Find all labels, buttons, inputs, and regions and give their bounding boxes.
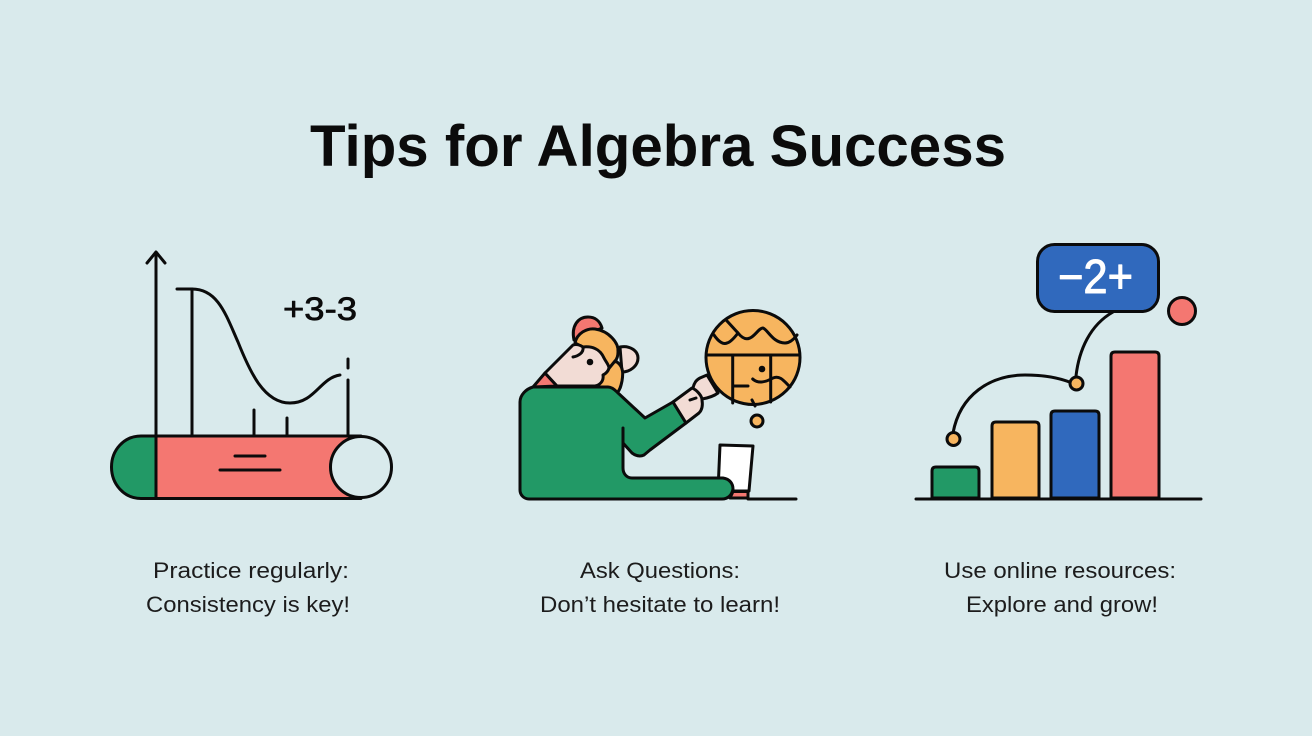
callout: speech bubble bbox=[1038, 244, 1158, 312]
caption: online resources: Use online resources: bbox=[944, 558, 1176, 583]
icon: hair bun bbox=[573, 317, 602, 340]
icon: ear bbox=[620, 347, 638, 372]
icon: collar bbox=[533, 373, 557, 387]
chart: axis and curve bbox=[147, 252, 348, 436]
ground line bbox=[748, 498, 796, 500]
caption: online resources bbox=[944, 558, 1176, 617]
icon: upper hair bbox=[575, 329, 618, 372]
icon: back hand bbox=[693, 375, 718, 400]
caption: practice: Practice regularly: bbox=[153, 558, 349, 583]
icon: laptop screen bbox=[718, 445, 753, 491]
icon: small dots bbox=[947, 377, 1083, 446]
icon: face bbox=[545, 345, 609, 386]
icon: person body bbox=[520, 387, 733, 499]
arrow: connector curve bbox=[953, 312, 1113, 433]
icon: red dot bbox=[1168, 298, 1196, 324]
panel: ask questions illustration bbox=[520, 310, 800, 499]
caption: practice: Consistency is key! bbox=[146, 592, 350, 617]
panel: practice illustration bbox=[112, 252, 392, 498]
caption: practice bbox=[146, 558, 350, 617]
icon: front hand bbox=[673, 388, 702, 423]
icon: foot bbox=[730, 492, 748, 498]
caption: ask questions: Ask Questions: bbox=[580, 558, 740, 583]
panel: online resources illustration bbox=[916, 244, 1201, 499]
icon: small dot bbox=[751, 415, 763, 427]
icon: globe bbox=[706, 310, 800, 406]
icon: pill bar bbox=[112, 436, 392, 498]
icon: lower hair bbox=[598, 360, 623, 393]
callout: speech bubble: −2+ bbox=[1058, 251, 1133, 304]
caption: online resources: Explore and grow! bbox=[966, 592, 1158, 617]
formula label: +3-3 bbox=[283, 291, 357, 327]
bar chart bbox=[916, 352, 1201, 499]
caption: ask questions bbox=[540, 558, 780, 617]
title: Tips for Algebra Success bbox=[310, 114, 1006, 179]
caption: ask questions: Don’t hesitate to learn! bbox=[540, 592, 780, 617]
